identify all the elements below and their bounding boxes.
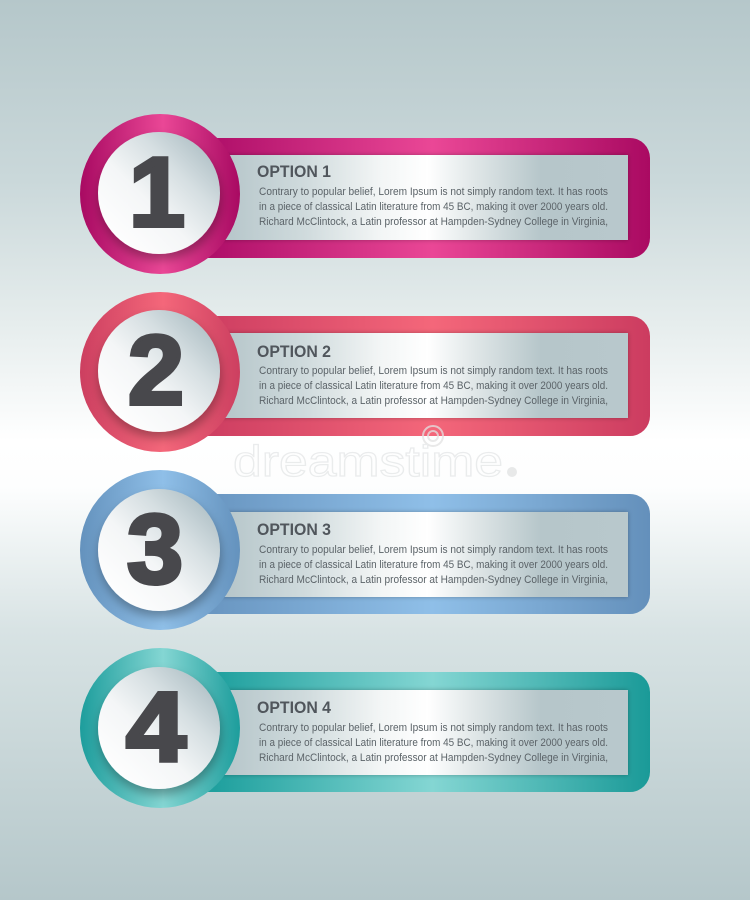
option 4 ring bbox=[80, 648, 240, 808]
option 2 ring bbox=[80, 292, 240, 452]
option 3 text: Richard McClintock, a Latin professor at Hampden-Sydney College in Virginia, bbox=[259, 574, 608, 586]
option 4 text: in a piece of classical Latin literature from 45 BC, making it over 2000 years old. bbox=[259, 737, 608, 749]
option 4 text: Contrary to popular belief, Lorem Ipsum is not simply random text. It has roots bbox=[259, 722, 608, 734]
panel: option 1 bbox=[80, 114, 650, 274]
option 2 heading: OPTION 2 bbox=[257, 343, 331, 361]
option 2 text: Contrary to popular belief, Lorem Ipsum is not simply random text. It has roots bbox=[259, 365, 608, 377]
option 2 text: Richard McClintock, a Latin professor at Hampden-Sydney College in Virginia, bbox=[259, 395, 608, 407]
number 3: 3 bbox=[127, 494, 183, 604]
option 1 text: Richard McClintock, a Latin professor at Hampden-Sydney College in Virginia, bbox=[259, 216, 608, 228]
option 4 text bbox=[259, 722, 608, 764]
option 3 heading: OPTION 3 bbox=[257, 521, 331, 539]
option 4 heading: OPTION 4 bbox=[257, 699, 332, 717]
number 1: 1 bbox=[129, 137, 185, 247]
option 3 text: Contrary to popular belief, Lorem Ipsum is not simply random text. It has roots bbox=[259, 544, 608, 556]
option 1 inner plate bbox=[215, 155, 628, 240]
option 1 ring bbox=[80, 114, 240, 274]
option 2 text bbox=[259, 365, 608, 407]
option 3 bar bbox=[205, 494, 650, 614]
option 4 bar bbox=[205, 672, 650, 792]
number 4: 4 bbox=[126, 672, 186, 782]
option 4 disc bbox=[98, 667, 220, 789]
panel: option 3 bbox=[80, 470, 650, 630]
watermark bbox=[233, 426, 517, 486]
option 1 text bbox=[259, 186, 608, 228]
option 1 heading: OPTION 1 bbox=[257, 163, 331, 181]
option 4 text: Richard McClintock, a Latin professor at Hampden-Sydney College in Virginia, bbox=[259, 752, 608, 764]
option 3 text bbox=[259, 544, 608, 586]
option 1 text: Contrary to popular belief, Lorem Ipsum is not simply random text. It has roots bbox=[259, 186, 608, 198]
option 2 disc bbox=[98, 310, 220, 432]
panel: option 4 bbox=[80, 648, 650, 808]
option 1 disc bbox=[98, 132, 220, 254]
option 2 inner plate bbox=[215, 333, 628, 418]
option 3 disc bbox=[98, 489, 220, 611]
option 4 inner plate bbox=[215, 690, 628, 775]
option 3 ring bbox=[80, 470, 240, 630]
option 3 text: in a piece of classical Latin literature from 45 BC, making it over 2000 years old. bbox=[259, 559, 608, 571]
option 2 bar bbox=[205, 316, 650, 436]
option 3 inner plate bbox=[215, 512, 628, 597]
number 2: 2 bbox=[128, 315, 184, 425]
watermark: dreamstime bbox=[233, 437, 503, 486]
option 2 text: in a piece of classical Latin literature from 45 BC, making it over 2000 years old. bbox=[259, 380, 608, 392]
panel: option 2 bbox=[80, 292, 650, 452]
option 1 text: in a piece of classical Latin literature from 45 BC, making it over 2000 years old. bbox=[259, 201, 608, 213]
option 1 bar bbox=[205, 138, 650, 258]
